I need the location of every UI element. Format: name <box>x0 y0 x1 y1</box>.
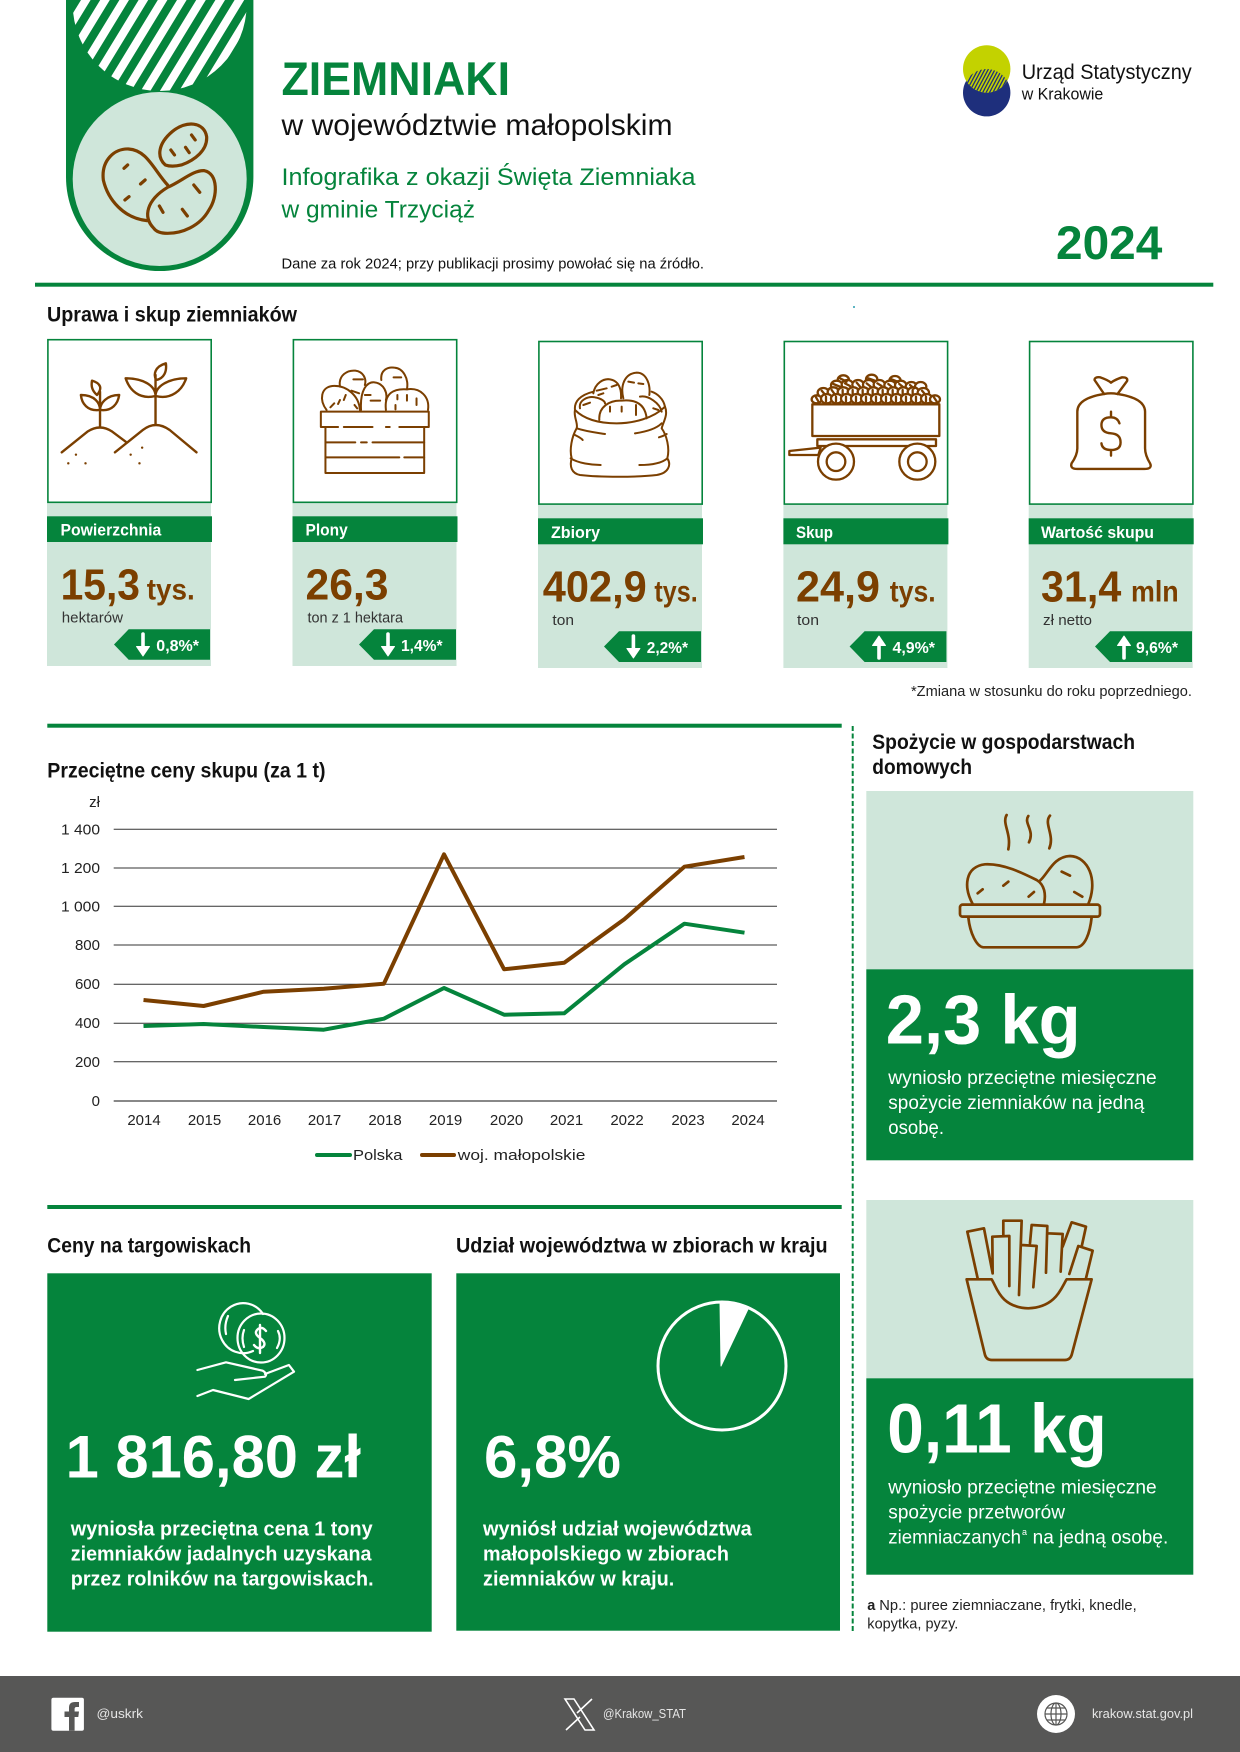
footer <box>0 1676 1240 1752</box>
panel: processed potato consumption: na jedną osobę. <box>1033 1527 1168 1548</box>
line chart: purchase prices 2014-2024: 2016 <box>248 1112 281 1129</box>
card: Plony: Plony <box>306 521 348 540</box>
line chart: purchase prices 2014-2024: 2017 <box>308 1112 341 1129</box>
footnote: a: kopytka, pyzy. <box>867 1616 958 1632</box>
card: Skup: tys. <box>890 576 936 609</box>
badge: change +9.6%: 9,6%* <box>1136 640 1179 657</box>
footnote: a: a <box>867 1598 876 1614</box>
line chart: purchase prices 2014-2024: 2020 <box>490 1112 523 1129</box>
card: Plony: ton z 1 hektara <box>308 611 404 627</box>
icon: sack of potatoes <box>571 373 669 477</box>
legend <box>317 1147 585 1164</box>
panel: potato consumption <box>866 791 1193 1160</box>
legend: Polska <box>353 1147 403 1164</box>
card: Powierzchnia: hektarów <box>62 611 124 627</box>
heading: market prices: Ceny na targowiskach <box>47 1235 251 1258</box>
panel: processed potato consumption: ziemniaczanych <box>888 1527 1021 1548</box>
line chart: purchase prices 2014-2024: 2022 <box>610 1112 644 1129</box>
subtitle: w województwie małopolskim <box>280 109 672 142</box>
badge: change -1.4%: 1,4%* <box>401 638 443 655</box>
panel: potato consumption: wyniosło przeciętne miesięczne <box>887 1068 1157 1089</box>
heading: household consumption: domowych <box>872 756 972 779</box>
icon: X <box>565 1699 594 1730</box>
badge: change +4.9% <box>850 631 946 662</box>
badge: change -1.4% <box>359 629 456 660</box>
badge: change -2.2%: 2,2%* <box>647 640 689 657</box>
card: Zbiory: tys. <box>654 576 698 609</box>
icon: seedlings <box>62 363 196 463</box>
panel: share of harvest <box>456 1273 840 1631</box>
line chart: purchase prices 2014-2024: 200 <box>75 1054 100 1071</box>
badge: change +9.6% <box>1095 631 1192 662</box>
line chart: purchase prices 2014-2024: 1 000 <box>61 898 100 916</box>
legend: woj. małopolskie <box>457 1147 585 1164</box>
panel: market prices: ziemniaków jadalnych uzyskana <box>71 1543 372 1566</box>
panel: market prices: przez rolników na targowiskach. <box>71 1568 374 1591</box>
line chart: purchase prices 2014-2024: 400 <box>75 1015 100 1032</box>
panel: processed potato consumption <box>866 1200 1193 1575</box>
card: Powierzchnia: Powierzchnia <box>60 521 162 540</box>
line chart: purchase prices 2014-2024: zł <box>89 794 101 811</box>
panel: processed potato consumption: spożycie przetworów <box>888 1502 1065 1523</box>
line chart: purchase prices 2014-2024: 2018 <box>368 1112 402 1129</box>
footer: @uskrk <box>96 1707 144 1721</box>
badge: change -2.2% <box>604 631 701 662</box>
card: Zbiory <box>538 342 703 668</box>
panel: potato consumption: osobę. <box>888 1118 944 1139</box>
card: Plony <box>292 340 458 666</box>
card: Wartość skupu <box>1029 342 1194 668</box>
pie chart: 6.8% <box>658 1301 786 1430</box>
icon: trailer of potatoes <box>789 375 940 480</box>
panel: share of harvest: wyniósł udział województwa <box>482 1518 752 1541</box>
line chart: purchase prices 2014-2024: 2014 <box>127 1112 161 1129</box>
occasion text: Infografika z okazji Święta Ziemniaka <box>282 163 696 191</box>
panel: share of harvest: ziemniaków w kraju. <box>483 1568 674 1591</box>
card: Powierzchnia <box>47 340 212 666</box>
icon: facebook <box>51 1698 84 1731</box>
card: Zbiory: Zbiory <box>551 523 601 542</box>
panel: processed potato consumption: 0,11 kg <box>887 1389 1107 1467</box>
panel: share of harvest: 6,8% <box>484 1423 621 1490</box>
heading: household consumption <box>872 731 1135 779</box>
icon: money bag <box>1071 377 1151 469</box>
card: Wartość skupu: 31,4 <box>1041 563 1122 612</box>
icon: coins over hand <box>197 1303 294 1399</box>
line chart: purchase prices 2014-2024: 2019 <box>429 1112 462 1129</box>
footnote: change: *Zmiana w stosunku do roku poprzedniego. <box>911 684 1192 700</box>
panel: processed potato consumption: a <box>1022 1527 1027 1537</box>
badge: change -0.8%: 0,8%* <box>156 638 200 655</box>
heading: share of national harvest: Udział województwa w zbiorach w kraju <box>456 1235 828 1258</box>
line chart: purchase prices 2014-2024: 600 <box>75 976 100 993</box>
line chart: purchase prices 2014-2024: 1 400 <box>61 822 100 838</box>
line chart: purchase prices 2014-2024: 1 200 <box>61 860 100 877</box>
logo: Urząd Statystyczny w Krakowie <box>961 45 1192 116</box>
card: Zbiory: ton <box>552 613 574 629</box>
card: Zbiory: 402,9 <box>543 563 647 612</box>
heading: purchase prices: Przeciętne ceny skupu (za 1 t) <box>47 759 326 782</box>
panel: market prices <box>47 1273 432 1632</box>
line chart: purchase prices 2014-2024: 2021 <box>550 1112 583 1129</box>
occasion text: w gminie Trzyciąż <box>280 196 475 224</box>
source note: Dane za rok 2024; przy publikacji prosimy powołać się na źródło. <box>282 256 704 272</box>
line chart: purchase prices 2014-2024: 800 <box>75 937 100 954</box>
icon: globe <box>1037 1695 1075 1733</box>
title: ZIEMNIAKI <box>282 52 510 105</box>
heading: crop and purchase: Uprawa i skup ziemniaków <box>47 304 298 326</box>
panel: share of harvest: małopolskiego w zbiorach <box>483 1543 729 1566</box>
line chart: purchase prices 2014-2024: 2015 <box>188 1112 221 1129</box>
card: Plony: 26,3 <box>306 560 388 609</box>
line chart: purchase prices 2014-2024 <box>61 794 777 1164</box>
icon: steaming bowl of potatoes <box>960 815 1100 947</box>
footer: krakow.stat.gov.pl <box>1092 1707 1193 1721</box>
card: Powierzchnia: 15,3 <box>61 560 140 609</box>
footer: @Krakow_STAT <box>603 1707 686 1721</box>
icon: crate of potatoes <box>321 367 429 473</box>
header emblem: green shield with potatoes <box>66 0 254 271</box>
logo: Urząd Statystyczny w Krakowie: w Krakowie <box>1021 84 1103 103</box>
icon: french fries <box>967 1221 1093 1360</box>
card: Skup <box>783 342 948 668</box>
line chart: purchase prices 2014-2024: 2024 <box>731 1112 765 1129</box>
series: woj. małopolskie <box>144 854 744 1006</box>
heading: household consumption: Spożycie w gospodarstwach <box>872 731 1135 754</box>
card: Skup: 24,9 <box>796 563 880 612</box>
icon: three potatoes <box>103 124 215 233</box>
card: Powierzchnia: tys. <box>147 573 195 606</box>
panel: potato consumption: spożycie ziemniaków na jedną <box>888 1093 1145 1114</box>
card: Wartość skupu: zł netto <box>1043 613 1092 629</box>
line chart: purchase prices 2014-2024: 0 <box>92 1093 100 1110</box>
footnote: a: Np.: puree ziemniaczane, frytki, knedle, <box>879 1598 1137 1614</box>
occasion text <box>280 163 696 224</box>
line chart: purchase prices 2014-2024: 2023 <box>671 1112 705 1129</box>
panel: potato consumption: 2,3 kg <box>886 980 1081 1058</box>
card: Wartość skupu: mln <box>1131 576 1179 609</box>
year: 2024 <box>1056 216 1162 269</box>
card: Skup: Skup <box>796 523 833 542</box>
card: Skup: ton <box>797 613 819 629</box>
footnote: a <box>867 1598 1137 1632</box>
card: Wartość skupu: Wartość skupu <box>1041 523 1154 542</box>
badge: change +4.9%: 4,9%* <box>892 640 936 657</box>
series: Polska <box>144 924 744 1030</box>
panel: market prices: 1 816,80 zł <box>66 1423 361 1490</box>
badge: change -0.8% <box>114 629 210 660</box>
panel: processed potato consumption: wyniosło przeciętne miesięczne <box>887 1477 1157 1498</box>
panel: market prices: wyniosła przeciętna cena 1 tony <box>70 1518 373 1541</box>
logo: Urząd Statystyczny w Krakowie: Urząd Statystyczny <box>1022 60 1192 84</box>
